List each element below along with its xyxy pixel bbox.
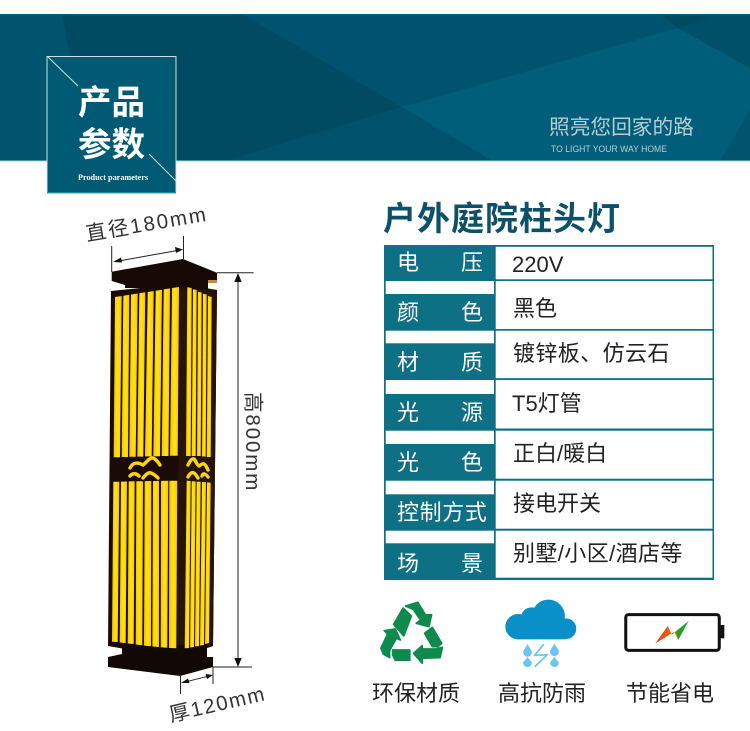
- row labels: 质: [461, 350, 483, 375]
- feature labels: 环保材质: [372, 681, 460, 706]
- row values: T5灯管: [512, 391, 582, 416]
- card subtitle: Product parameters: [78, 172, 149, 182]
- label gaps: [386, 281, 494, 543]
- dimension: thickness: 厚120mm: [167, 682, 268, 727]
- value cells: [496, 247, 712, 578]
- row values: 黑色: [513, 296, 557, 321]
- card heading: 参数: [78, 127, 145, 164]
- banner: [0, 14, 750, 161]
- row labels: 源: [461, 400, 483, 425]
- icon: battery: [626, 615, 724, 650]
- slogan: TO LIGHT YOUR WAY HOME: [551, 144, 667, 155]
- dimension: height: 高800mm: [241, 392, 264, 492]
- lamp cap: [112, 259, 217, 290]
- row labels: [397, 250, 487, 576]
- row values: 接电开关: [513, 491, 601, 516]
- dimension: diameter: [84, 203, 209, 272]
- row labels: 光: [397, 450, 419, 475]
- row labels: 控制方式: [397, 500, 487, 525]
- icon: recycle: [381, 602, 442, 663]
- row labels: 颜: [397, 300, 419, 325]
- slogan: 照亮您回家的路: [549, 116, 694, 139]
- upper side panels: [186, 287, 212, 457]
- row labels: 材: [397, 350, 419, 375]
- wave ornaments: [130, 458, 208, 478]
- card heading: 产品: [78, 85, 145, 122]
- slogan: [549, 116, 694, 155]
- upper front panels: [114, 287, 179, 457]
- product title: 户外庭院柱头灯: [383, 200, 621, 237]
- card: product parameters: [47, 56, 176, 193]
- lamp base: [108, 645, 213, 676]
- row labels: 色: [461, 300, 483, 325]
- parameter table: [384, 245, 714, 580]
- row labels: 场: [397, 551, 419, 576]
- dimension: height: [213, 273, 264, 667]
- icon: cloud and rain: [505, 600, 576, 667]
- lower front panels: [112, 481, 177, 648]
- row values: 220V: [512, 252, 564, 277]
- row labels: 光: [397, 400, 419, 425]
- lamp body: [108, 284, 217, 658]
- card heading: [78, 85, 145, 164]
- lower side panels: [185, 481, 211, 648]
- feature labels: 高抗防雨: [498, 681, 586, 706]
- row labels: 压: [461, 250, 483, 275]
- row labels: 电: [397, 250, 419, 275]
- row labels: 景: [461, 551, 483, 576]
- row values: 正白/暖白: [513, 441, 607, 466]
- lamp illustration: [108, 259, 217, 676]
- row values: [512, 252, 683, 566]
- row values: 别墅/小区/酒店等: [513, 541, 683, 566]
- row labels: 色: [461, 450, 483, 475]
- dimension: diameter: 直径180mm: [84, 203, 209, 246]
- row values: 镀锌板、仿云石: [513, 341, 670, 366]
- feature labels: [372, 681, 714, 706]
- feature labels: 节能省电: [626, 681, 714, 706]
